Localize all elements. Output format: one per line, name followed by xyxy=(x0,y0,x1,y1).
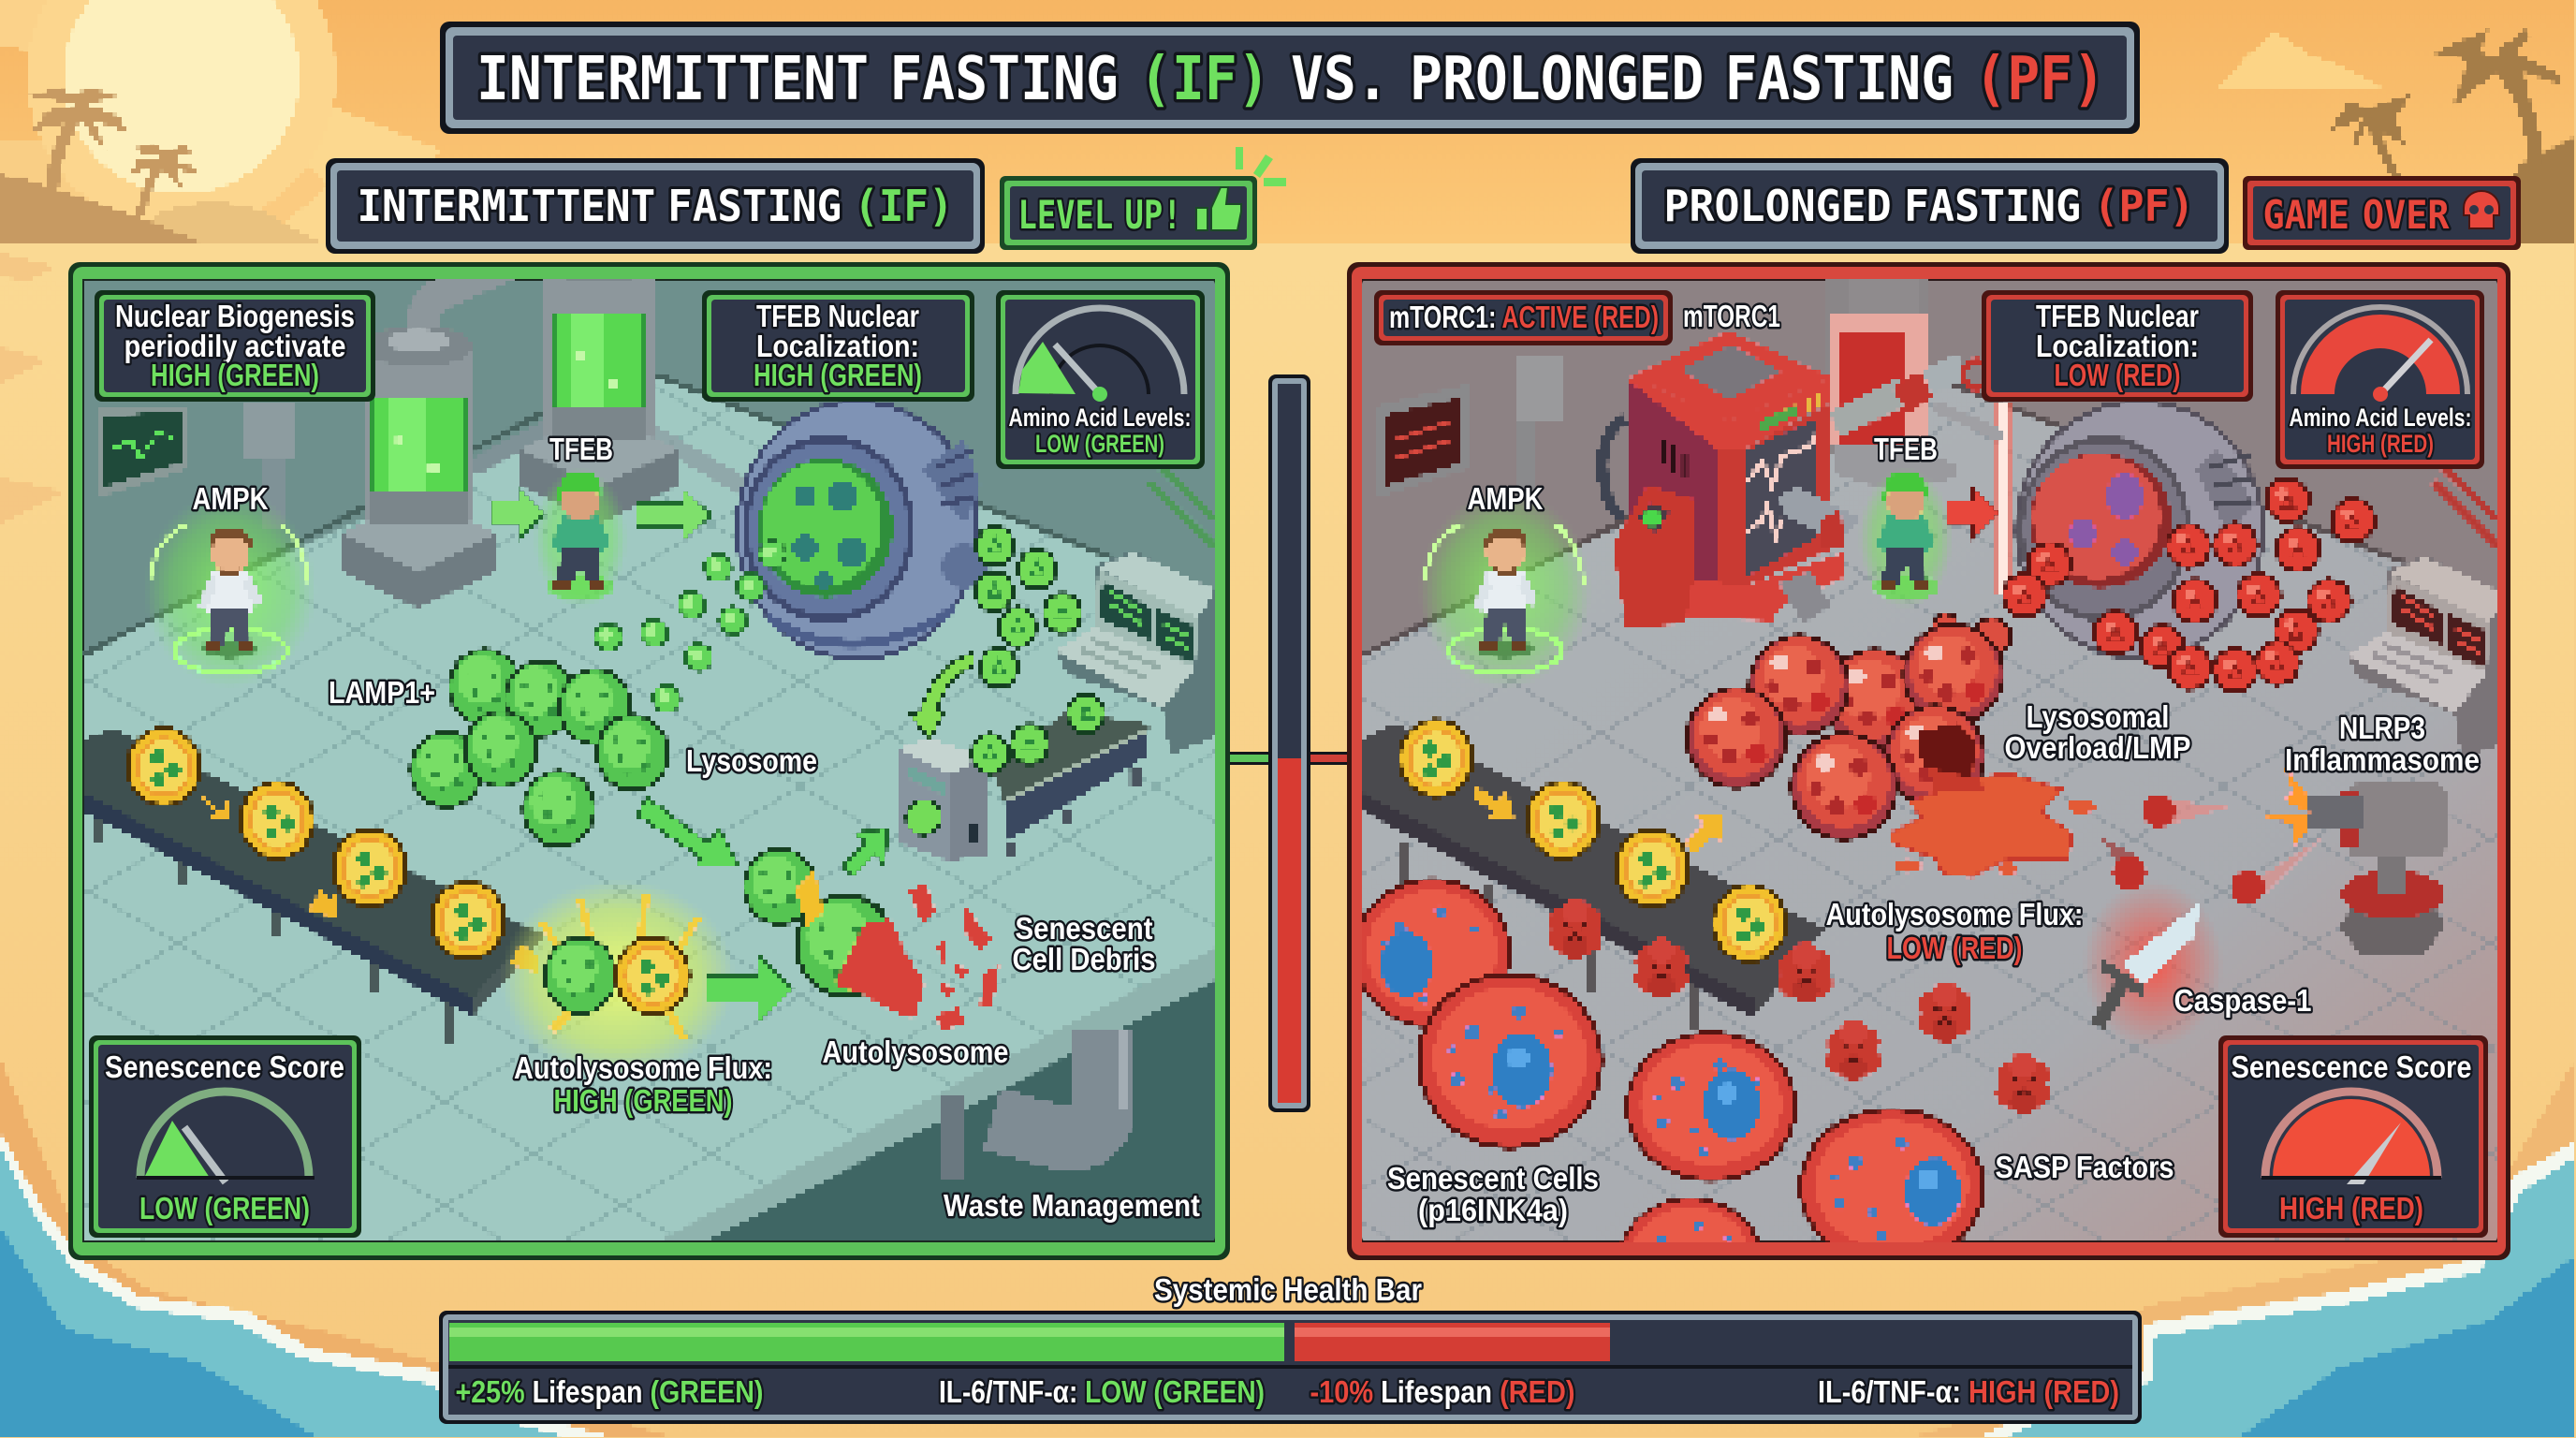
icon: wall junction box xyxy=(242,403,296,529)
heading: intermittent fasting: INTERMITTENT FASTING (IF) xyxy=(358,181,954,231)
gauge: amino acid levels high xyxy=(2276,290,2484,469)
label: caspase-1: Caspase-1 xyxy=(2174,983,2312,1018)
gauge: amino acid levels low: Amino Acid Levels: xyxy=(1009,404,1191,432)
arrow: tank to TFEB xyxy=(492,488,544,538)
icon: console red xyxy=(2348,555,2507,760)
heading: intermittent fasting xyxy=(326,158,985,254)
label: autolysosome: Autolysosome xyxy=(822,1034,1009,1069)
gauge: senescence score high: Senescence Score xyxy=(2232,1049,2471,1084)
icon: autophagosome coins xyxy=(125,726,506,961)
label: TFEB: TFEB xyxy=(1874,432,1938,466)
stat: PF lifespan: -10% Lifespan (RED) xyxy=(1310,1374,1574,1409)
label: NLRP3 inflammasome: Inflammasome xyxy=(2285,742,2480,777)
icon: skull xyxy=(2464,191,2499,228)
arrow: yellow coin arrows xyxy=(198,794,538,974)
arrow: curve to machine xyxy=(910,653,973,740)
panel: prolonged fasting scene xyxy=(1347,262,2510,1322)
callout: TFEB localization low: LOW (RED) xyxy=(2054,358,2181,392)
icon: belt lysosomes xyxy=(1009,692,1106,766)
label: SASP factors: SASP Factors xyxy=(1996,1150,2174,1184)
label: lysosomal overload: Lysosomal xyxy=(2026,699,2170,734)
stat: IF lifespan: +25% Lifespan (GREEN) xyxy=(455,1374,764,1409)
label: AMPK: AMPK xyxy=(1468,481,1544,516)
icon: console xyxy=(1056,550,1215,756)
icon: laser barrier xyxy=(1994,404,2012,596)
label: senescent cells xyxy=(1387,1161,1599,1227)
label: TFEB: TFEB xyxy=(549,432,613,466)
label: autolysosome flux high: Autolysosome Flux: xyxy=(514,1050,772,1085)
callout: TFEB localization high: HIGH (GREEN) xyxy=(754,358,922,392)
icon: nucleus chamber damaged xyxy=(2014,399,2265,661)
icon: red orbit balls xyxy=(2001,477,2377,694)
center vertical meter xyxy=(1229,374,1347,1112)
arrow: TFEB to nucleus xyxy=(637,490,710,540)
callout: TFEB localization low: TFEB Nuclear xyxy=(2036,299,2199,333)
label: waste management: Waste Management xyxy=(944,1188,1200,1223)
badge: game over: GAME OVER xyxy=(2263,192,2450,238)
icon: caspase knife xyxy=(2083,880,2223,1049)
icon: red tank and pipe xyxy=(1827,271,2003,493)
label: autolysosome flux low: LOW (RED) xyxy=(1887,931,2022,965)
arrow: autolysosome to machine xyxy=(842,829,887,875)
icon: inflammasome turret xyxy=(2251,763,2446,953)
label: AMPK: AMPK xyxy=(193,481,269,516)
gauge: amino acid levels high: Amino Acid Levels: xyxy=(2290,404,2471,432)
icon: main conveyor belt xyxy=(82,728,543,1044)
icon: TFEB hero xyxy=(1859,468,1953,609)
label: senescent cells: Senescent Cells xyxy=(1387,1161,1599,1196)
icon: lysosome cluster xyxy=(409,648,670,848)
gauge: amino acid levels low: LOW (GREEN) xyxy=(1035,430,1164,458)
label: autolysosome flux high: HIGH (GREEN) xyxy=(554,1083,732,1118)
icon: green tank 2 xyxy=(520,279,679,524)
label: autolysosome flux low xyxy=(1825,897,2084,965)
gauge: senescence score low xyxy=(89,1035,361,1238)
panel: systemic health bar xyxy=(439,1311,2142,1424)
icon: SASP factors xyxy=(1548,898,2050,1114)
bar: PF health xyxy=(1295,1323,1610,1361)
icon: waste pipe xyxy=(941,1030,1123,1180)
callout: nuclear biogenesis: periodily activate xyxy=(124,329,346,363)
label: autolysosome flux low: Autolysosome Flux: xyxy=(1825,897,2084,932)
arrow: yellow right xyxy=(1473,786,1515,819)
title banner xyxy=(440,22,2140,134)
icon: coins on belt xyxy=(1398,718,1788,963)
icon: red lysosomes xyxy=(1685,611,2012,841)
heading: prolonged fasting: PROLONGED FASTING (PF) xyxy=(1664,181,2194,231)
callout: mTORC1 active: mTORC1: ACTIVE (RED) xyxy=(1389,300,1659,334)
label: senescent cell debris: Senescent xyxy=(1015,911,1153,946)
label: LAMP1+: LAMP1+ xyxy=(329,675,435,710)
icon: mTORC1 machine xyxy=(1603,330,1860,627)
callout: nuclear biogenesis: HIGH (GREEN) xyxy=(151,358,319,392)
gauge: amino acid levels high: HIGH (RED) xyxy=(2327,430,2434,458)
label: lysosomal overload xyxy=(2005,699,2190,765)
gauge: senescence score low: LOW (GREEN) xyxy=(139,1191,310,1225)
heading: prolonged fasting xyxy=(1631,158,2229,254)
icon: TFEB hero xyxy=(534,468,627,609)
badge: level up xyxy=(1000,147,1286,250)
callout: TFEB localization high: Localization: xyxy=(756,329,919,363)
icon: autolysosome xyxy=(742,847,1000,1030)
label: lysosome: Lysosome xyxy=(686,743,817,778)
callout: nuclear biogenesis xyxy=(95,290,375,402)
icon: machine lysosome xyxy=(970,732,1011,775)
icon: main conveyor red panel xyxy=(1362,723,1825,1030)
gauge: amino acid levels low xyxy=(996,290,1205,469)
icon: wall monitor xyxy=(96,406,189,498)
badge: level up: LEVEL UP! xyxy=(1018,192,1181,238)
panel: intermittent fasting scene xyxy=(68,242,1230,1260)
icon: thumbs up xyxy=(1196,187,1241,230)
arrow: TFEB blocked xyxy=(1947,488,1998,538)
icon: processor machine xyxy=(899,738,986,861)
icon: nucleus chamber xyxy=(735,399,987,661)
label: lysosomal overload: Overload/LMP xyxy=(2005,730,2190,765)
icon: green tank 1 xyxy=(341,326,496,609)
label: mTORC1: mTORC1 xyxy=(1683,299,1780,333)
icon: fusion burst xyxy=(501,880,735,1077)
icon: small conveyor xyxy=(990,712,1149,858)
badge: game over xyxy=(2243,176,2521,250)
icon: AMPK hero xyxy=(1419,492,1591,688)
gauge: senescence score high xyxy=(2218,1035,2488,1238)
icon: blood splat xyxy=(1891,768,2095,877)
label: senescent cells: (p16INK4a) xyxy=(1418,1193,1568,1227)
icon: projectiles xyxy=(2101,794,2321,904)
gauge: senescence score high: HIGH (RED) xyxy=(2279,1191,2423,1225)
icon: senescent cells xyxy=(1353,877,1985,1322)
label: senescent cell debris: Cell Debris xyxy=(1013,942,1155,976)
icon: red wall monitor xyxy=(1376,384,1470,498)
callout: TFEB localization high xyxy=(702,290,974,402)
callout: TFEB localization low: Localization: xyxy=(2036,329,2199,363)
label: NLRP3 inflammasome: NLRP3 xyxy=(2339,711,2425,745)
title banner: INTERMITTENT FASTING (IF) VS. PROLONGED FASTING (PF) xyxy=(476,45,2105,114)
label: senescent cell debris xyxy=(1013,911,1155,976)
icon: orbiting lysosomes xyxy=(973,524,1083,689)
stat: IF cytokines: IL-6/TNF-α: LOW (GREEN) xyxy=(939,1374,1265,1409)
arrow: fusion to autolysosome xyxy=(707,955,793,1022)
label: autolysosome flux high xyxy=(514,1050,772,1118)
callout: TFEB localization low xyxy=(1982,290,2253,402)
callout: mTORC1 active xyxy=(1374,290,1673,345)
arrow: lysosome to autolysosome xyxy=(637,798,739,866)
callout: TFEB localization high: TFEB Nuclear xyxy=(756,299,919,333)
arrow: yellow up-right xyxy=(1685,813,1724,854)
label: systemic health bar: Systemic Health Bar xyxy=(1154,1272,1422,1307)
gauge: senescence score low: Senescence Score xyxy=(105,1049,344,1084)
stat: PF cytokines: IL-6/TNF-α: HIGH (RED) xyxy=(1818,1374,2119,1409)
label: NLRP3 inflammasome xyxy=(2285,711,2480,777)
bar: IF health xyxy=(449,1323,1284,1361)
icon: small vesicle chain xyxy=(593,539,787,713)
icon: AMPK hero xyxy=(144,492,316,688)
callout: nuclear biogenesis: Nuclear Biogenesis xyxy=(115,299,355,333)
